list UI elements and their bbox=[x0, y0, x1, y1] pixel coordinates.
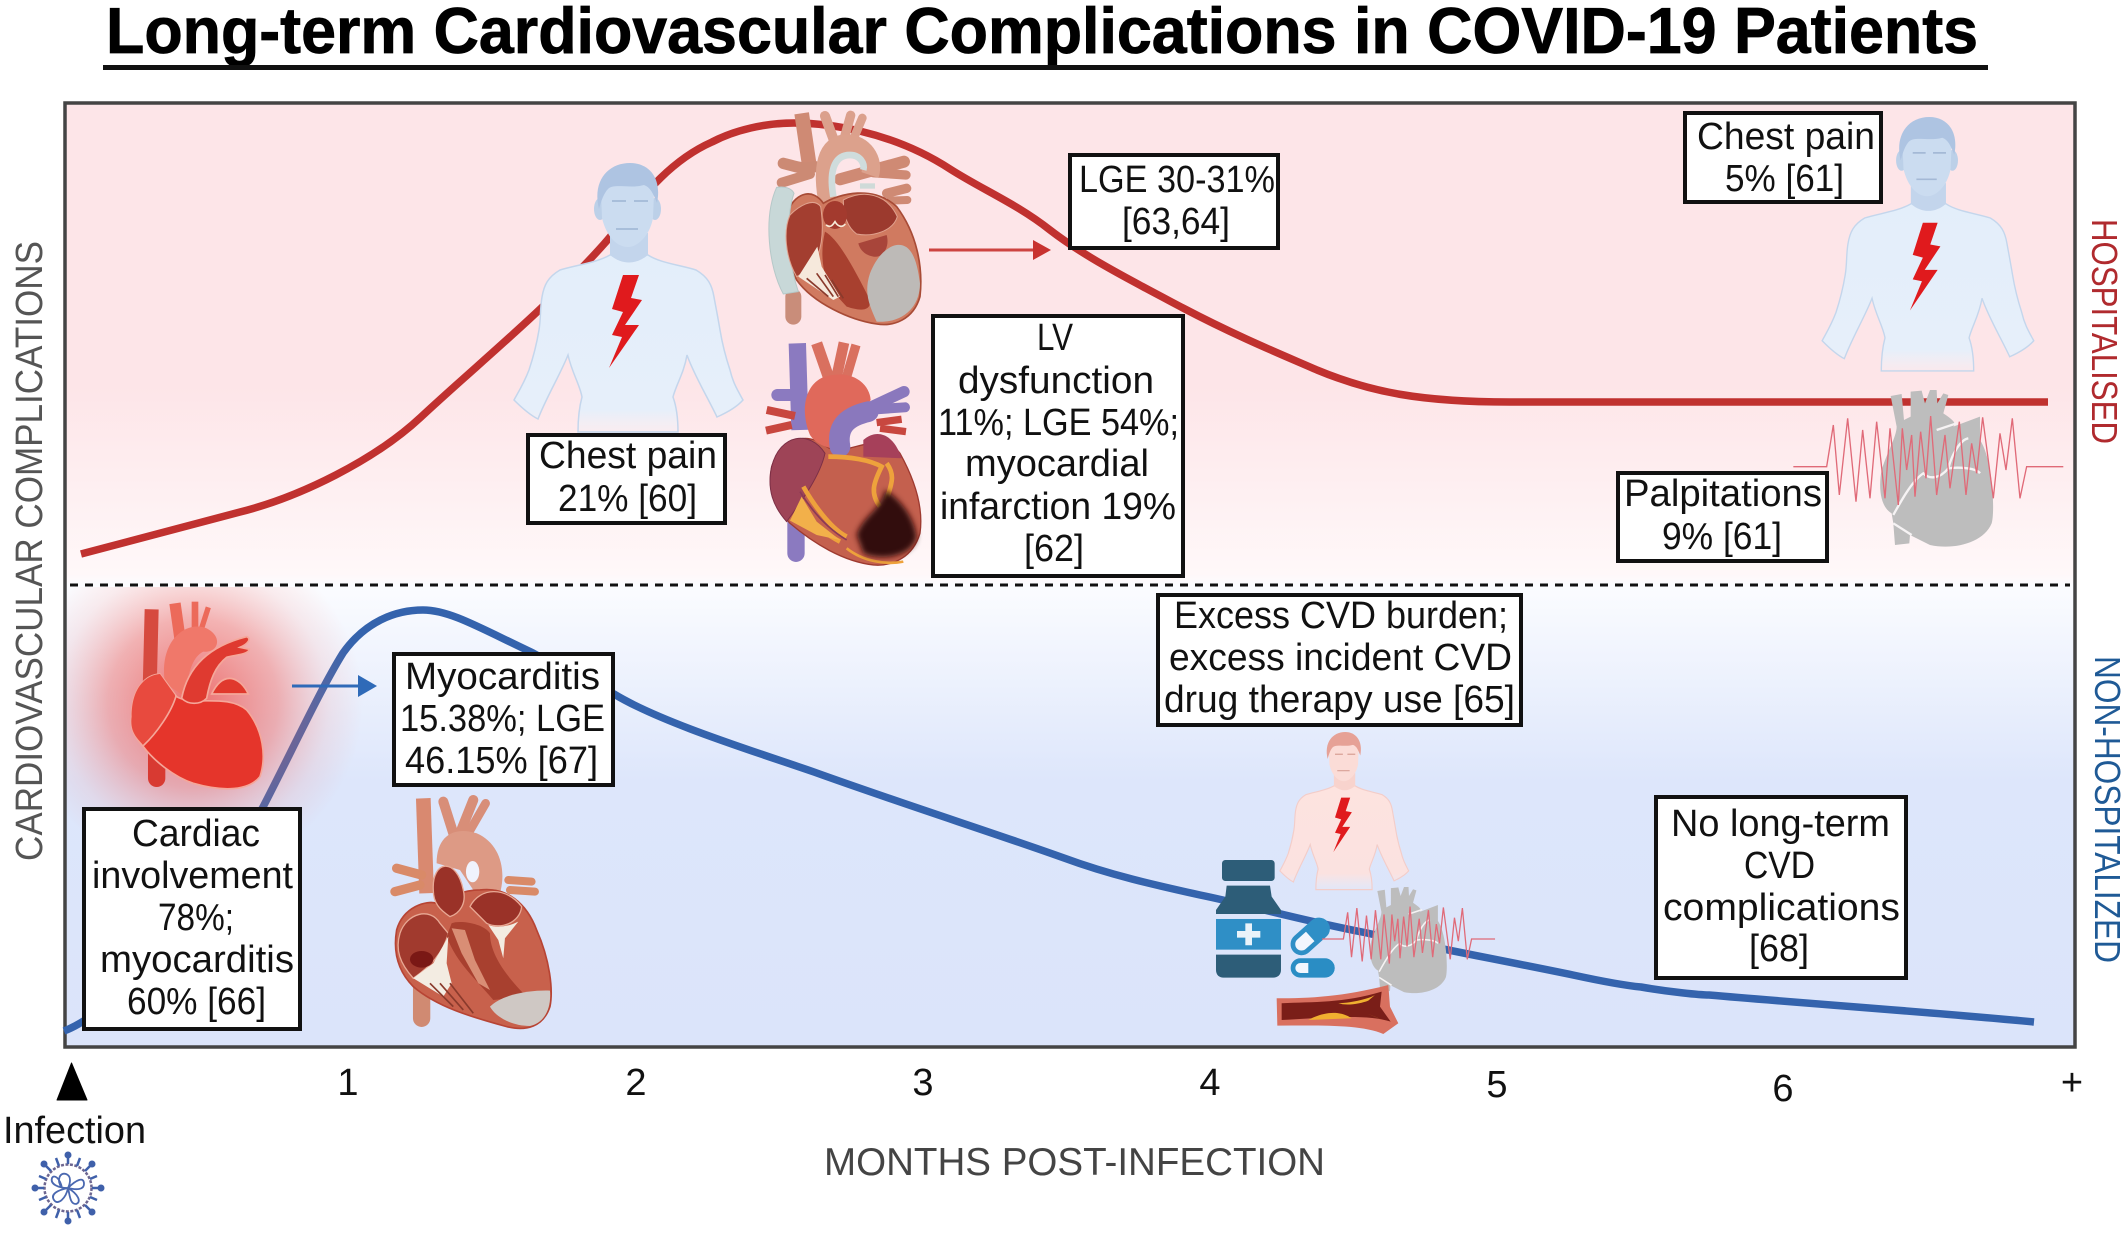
callout: excess CVD burden: excess incident CVD bbox=[1169, 637, 1512, 679]
arrow: red, LGE bbox=[929, 240, 1051, 260]
icon: atherosclerotic artery bbox=[1277, 985, 1398, 1034]
callout: LV dysfunction bbox=[933, 316, 1183, 576]
callout: cardiac involvement 78%: Cardiac bbox=[132, 813, 260, 855]
icon: medicine bottle bbox=[1216, 860, 1281, 978]
callout: chest pain 21%: Chest pain bbox=[539, 435, 717, 477]
blue curve: non-hospitalized bbox=[64, 610, 2034, 1031]
callout: myocarditis 15.38%: 15.38%; LGE bbox=[400, 698, 605, 740]
x axis title: MONTHS POST-INFECTION bbox=[824, 1141, 1325, 1184]
callout: no long-term CVD complications: complications bbox=[1663, 887, 1900, 929]
x axis month labels: 5 bbox=[1486, 1064, 1508, 1106]
callout: excess CVD burden: drug therapy use [65] bbox=[1164, 679, 1515, 721]
x axis month labels bbox=[337, 1062, 2083, 1110]
icon: man with chest pain, non-hospitalized bbox=[1280, 732, 1409, 890]
icon: inflamed heart bbox=[131, 602, 263, 789]
callout: palpitations 9% bbox=[1618, 473, 1827, 561]
callout: chest pain 5%: Chest pain bbox=[1697, 116, 1875, 158]
callout: myocarditis 15.38%: 46.15% [67] bbox=[405, 740, 598, 782]
callout: palpitations 9%: 9% [61] bbox=[1662, 516, 1782, 558]
callout: LV dysfunction: 11%; LGE 54%; bbox=[938, 402, 1179, 444]
icon: heart with myocardial infarction bbox=[766, 343, 921, 565]
icon: heart cross-section with LGE bbox=[769, 113, 921, 325]
callout: LV dysfunction: dysfunction bbox=[958, 360, 1154, 402]
x axis month labels: 1 bbox=[337, 1062, 359, 1104]
y axis label: CARDIOVASCULAR COMPLICATIONS bbox=[9, 241, 51, 861]
callout: excess CVD burden: Excess CVD burden; bbox=[1174, 595, 1508, 637]
callout: LGE 30-31%: [63,64] bbox=[1122, 201, 1230, 243]
icon: heart cross-section, myocarditis bbox=[395, 798, 551, 1028]
callout: no long-term CVD complications: CVD bbox=[1744, 845, 1815, 887]
callout: cardiac involvement 78%: 78%; bbox=[158, 897, 234, 939]
callout: no long-term CVD complications: [68] bbox=[1749, 928, 1809, 970]
panel: chart background bbox=[65, 103, 2075, 1047]
callout: LV dysfunction: myocardial bbox=[965, 443, 1149, 485]
callout: cardiac involvement 78% bbox=[84, 809, 300, 1029]
x axis month labels: 2 bbox=[625, 1062, 647, 1104]
callout: no long-term CVD complications bbox=[1656, 797, 1906, 978]
callout: chest pain 21%: 21% [60] bbox=[558, 478, 697, 520]
callout: LV dysfunction: infarction 19% bbox=[940, 486, 1176, 528]
callout: chest pain 21% bbox=[528, 435, 725, 523]
callout: chest pain 5% bbox=[1685, 113, 1881, 202]
callout: LGE 30-31% bbox=[1070, 155, 1278, 248]
icon: ECG trace, palpitations bbox=[1793, 416, 2063, 505]
icon: man with chest pain, hospitalised bbox=[514, 163, 743, 432]
callout: cardiac involvement 78%: 60% [66] bbox=[127, 981, 266, 1023]
icon: infection marker triangle bbox=[57, 1063, 87, 1100]
icon: grey heart, palpitations bbox=[1880, 390, 1993, 547]
callout: LGE 30-31%: LGE 30-31% bbox=[1079, 159, 1275, 201]
callout: myocarditis 15.38% bbox=[394, 654, 613, 785]
callout: no long-term CVD complications: No long-term bbox=[1671, 803, 1890, 845]
group label: hospitalised: HOSPITALISED bbox=[2084, 219, 2125, 444]
group label: non-hospitalized: NON-HOSPITALIZED bbox=[2087, 656, 2128, 963]
callout: cardiac involvement 78%: myocarditis bbox=[100, 939, 294, 981]
callout: LV dysfunction: [62] bbox=[1024, 528, 1084, 570]
icon: virus bbox=[32, 1152, 104, 1224]
infection label: Infection bbox=[3, 1110, 146, 1152]
icon: man with chest pain, late phase bbox=[1822, 117, 2034, 371]
x axis month labels: 6 bbox=[1772, 1068, 1794, 1110]
x axis month labels: 4 bbox=[1199, 1062, 1221, 1104]
red glow behind inflamed heart bbox=[67, 587, 367, 877]
x axis month labels: + bbox=[2061, 1062, 2083, 1104]
icon: ECG trace, non-hospitalized bbox=[1322, 907, 1495, 964]
callout: palpitations 9%: Palpitations bbox=[1624, 473, 1822, 515]
callout: myocarditis 15.38%: Myocarditis bbox=[405, 656, 600, 698]
callout: cardiac involvement 78%: involvement bbox=[92, 855, 293, 897]
icon: pills bbox=[1289, 916, 1335, 977]
callout: chest pain 5%: 5% [61] bbox=[1725, 158, 1844, 200]
arrow: blue, myocarditis bbox=[292, 675, 377, 697]
icon: grey heart, non-hospitalized bbox=[1370, 887, 1447, 993]
callout: excess CVD burden bbox=[1158, 595, 1521, 725]
callout: LV dysfunction: LV bbox=[1037, 317, 1074, 359]
x axis month labels: 3 bbox=[912, 1062, 934, 1104]
red curve: hospitalised bbox=[81, 123, 2048, 554]
